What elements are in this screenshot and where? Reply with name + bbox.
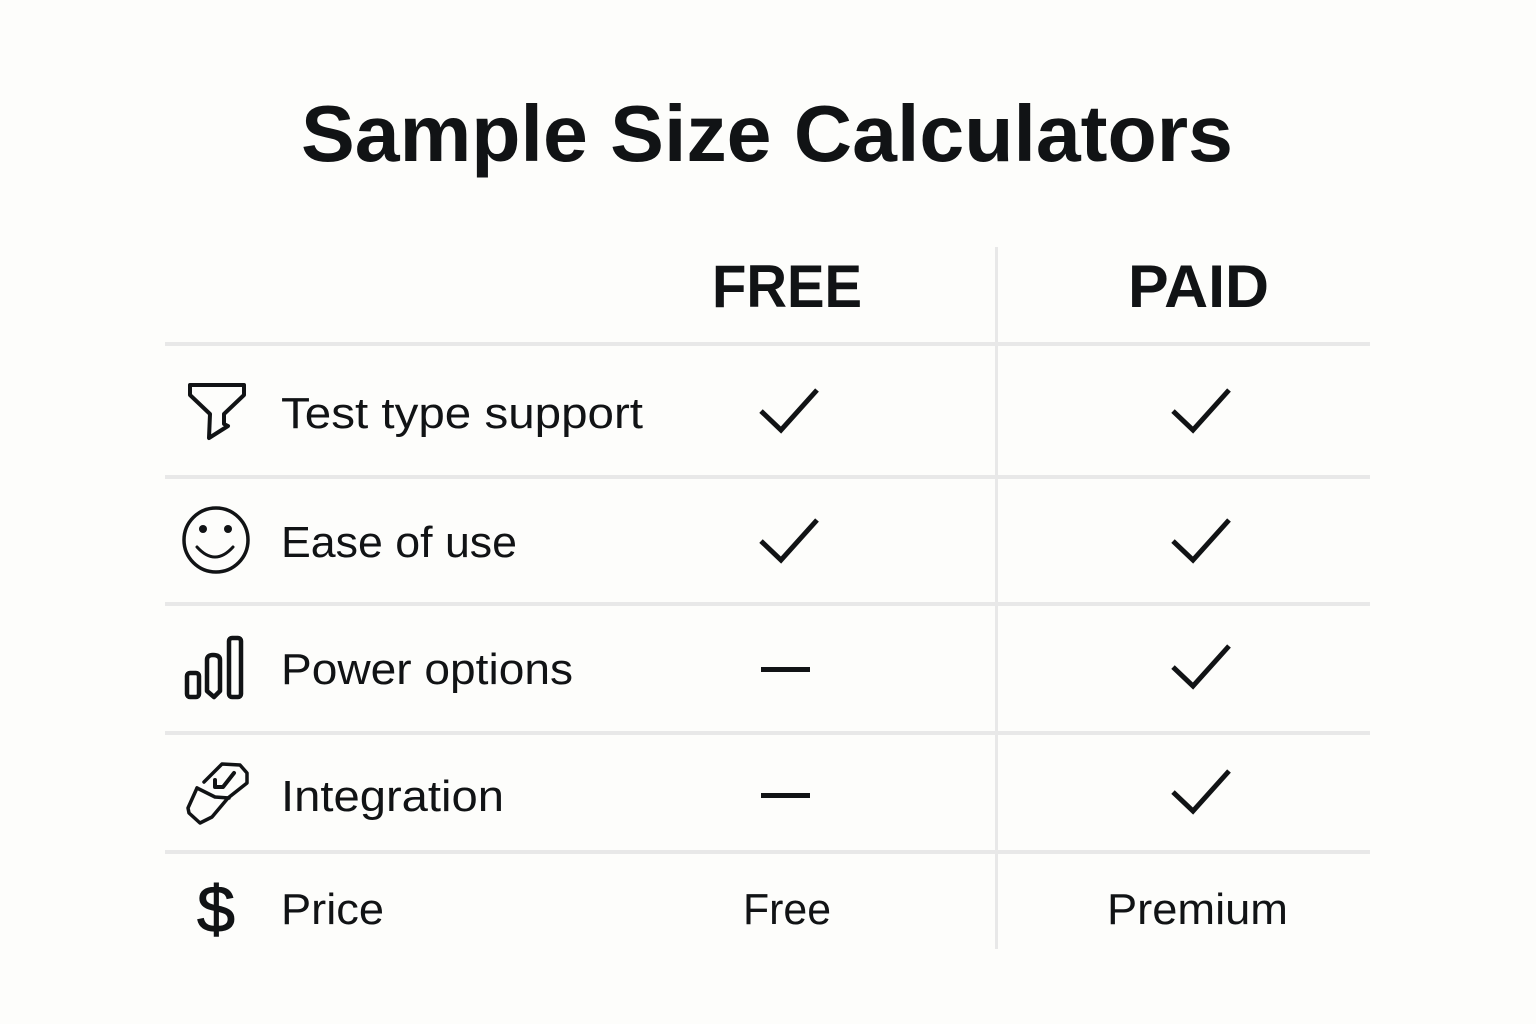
- row: price: [197, 872, 1288, 946]
- value: premium: Premium: [1107, 885, 1288, 934]
- column heading: paid: PAID: [1128, 253, 1269, 320]
- check: paid: [1173, 646, 1229, 686]
- dash: free: [761, 667, 810, 672]
- label: power options: Power options: [281, 645, 573, 694]
- row: ease of use: [184, 508, 1229, 572]
- check: free: [761, 390, 817, 430]
- label: ease of use: Ease of use: [281, 518, 517, 567]
- label: integration: Integration: [281, 772, 504, 821]
- column heading: free: FREE: [712, 253, 862, 320]
- dash: free: [761, 793, 810, 798]
- icon: smiley face: [184, 508, 248, 572]
- icon: integration plug: [188, 764, 247, 823]
- icon: bar chart: [187, 638, 241, 697]
- row: integration: [188, 764, 1229, 823]
- check: paid: [1173, 390, 1229, 430]
- label: price: Price: [281, 885, 384, 934]
- label: test type support: Test type support: [281, 389, 643, 438]
- value: free: Free: [743, 885, 831, 934]
- title: Sample Size Calculators: [301, 89, 1233, 178]
- icon: dollar sign: $: [197, 872, 235, 946]
- icon: funnel: [190, 385, 244, 438]
- row: power options: [187, 638, 1229, 697]
- check: paid: [1173, 520, 1229, 560]
- check: free: [761, 520, 817, 560]
- row: test type support: [190, 385, 1229, 438]
- check: paid: [1173, 771, 1229, 811]
